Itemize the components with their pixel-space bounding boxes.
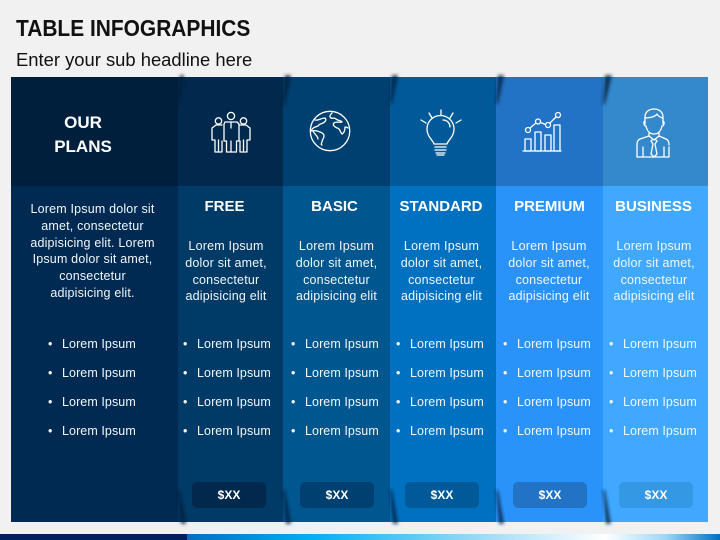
description: standard: Lorem Ipsum [404,239,479,253]
list: standard: Lorem Ipsum [410,395,484,409]
text: • [48,337,52,351]
list: free [183,337,271,438]
list: basic: Lorem Ipsum [305,366,379,380]
list: standard: Lorem Ipsum [410,424,484,438]
list: premium: Lorem Ipsum [517,366,591,380]
text: • [291,366,295,380]
heading: our plans: PLANS [54,136,112,156]
bottom color strip [0,534,720,540]
text: • [291,337,295,351]
list: our plans [48,337,136,438]
description: free: adipisicing elit [185,289,267,303]
plan name: basic: BASIC [311,198,358,215]
intro text: amet, consectetur [41,219,144,233]
list: premium: Lorem Ipsum [517,395,591,409]
text: • [291,424,295,438]
list: basic: Lorem Ipsum [305,424,379,438]
price: business: $XX [645,488,667,502]
description: premium: Lorem Ipsum [511,239,587,253]
intro text: Ipsum dolor sit amet, [33,252,152,266]
list: business: Lorem Ipsum [623,395,697,409]
title: TABLE INFOGRAPHICS [16,15,250,41]
list: free: Lorem Ipsum [197,337,271,351]
plan name: free: FREE [204,198,244,215]
list: our plans: Lorem Ipsum [62,395,136,409]
description: basic: dolor sit amet, [296,256,377,270]
subtitle: Enter your sub headline here [16,49,252,70]
intro text: consectetur [59,269,126,283]
panel: our plans column [11,77,178,522]
description: standard: dolor sit amet, [401,256,482,270]
description: free: consectetur [193,273,259,287]
list: standard: Lorem Ipsum [410,337,484,351]
text: • [396,395,400,409]
price: standard [405,482,479,508]
list: standard: Lorem Ipsum [410,366,484,380]
icon: bar chart with line [522,112,562,152]
list: our plans: Lorem Ipsum [62,337,136,351]
text: • [48,395,52,409]
text: • [48,366,52,380]
description: business: consectetur [621,273,687,287]
description: standard: consectetur [408,273,475,287]
price: basic [300,482,374,508]
text: • [609,424,613,438]
description: basic: Lorem Ipsum [299,239,374,253]
price: free: $XX [218,488,240,502]
description: free [185,239,267,303]
description: premium: consectetur [516,273,582,287]
plan name: standard: STANDARD [399,198,483,215]
panel: standard column [390,77,496,522]
panel: business column [603,77,708,522]
description: free: Lorem Ipsum [188,239,264,253]
description: premium [508,239,590,303]
icon: businessman [636,108,670,158]
price: basic: $XX [326,488,348,502]
panel: basic column [283,77,390,522]
list: free: Lorem Ipsum [197,366,271,380]
list: our plans: Lorem Ipsum [62,424,136,438]
description: business: adipisicing elit [613,289,695,303]
plan descriptions [185,239,695,303]
plan names [204,198,692,215]
list: free: Lorem Ipsum [197,395,271,409]
list: our plans: Lorem Ipsum [62,366,136,380]
description: basic [296,239,377,303]
text: • [396,424,400,438]
description: business: Lorem Ipsum [616,239,692,253]
text: • [48,424,52,438]
text: • [183,395,187,409]
description: premium: adipisicing elit [508,289,590,303]
text: • [503,337,507,351]
price: business [619,482,693,508]
list: basic: Lorem Ipsum [305,337,379,351]
description: standard: adipisicing elit [401,289,482,303]
description: business: dolor sit amet, [613,256,695,270]
list: premium: Lorem Ipsum [517,424,591,438]
icon: light bulb [420,109,462,156]
list: business: Lorem Ipsum [623,424,697,438]
list: standard [396,337,484,438]
text: • [183,424,187,438]
text: • [291,395,295,409]
text: • [396,366,400,380]
text: • [609,337,613,351]
intro text: adipisicing elit. [50,286,135,300]
panel: free column [178,77,283,522]
list: business: Lorem Ipsum [623,337,697,351]
price: premium [513,482,587,508]
list: premium [503,337,591,438]
plan name: business: BUSINESS [615,198,692,215]
list: basic [291,337,379,438]
price: free [192,482,266,508]
intro text [30,202,155,300]
list: basic: Lorem Ipsum [305,395,379,409]
text: • [183,366,187,380]
intro text: adipisicing elit. Lorem [30,236,155,250]
intro text: Lorem Ipsum dolor sit [31,202,154,216]
price: standard: $XX [431,488,453,502]
description: standard [401,239,482,303]
icon: team [211,112,251,153]
description: basic: adipisicing elit [296,289,377,303]
text: • [609,395,613,409]
description: basic: consectetur [303,273,370,287]
text: • [503,424,507,438]
list: premium: Lorem Ipsum [517,337,591,351]
list: free: Lorem Ipsum [197,424,271,438]
text: • [183,337,187,351]
list: business [609,337,697,438]
description: premium: dolor sit amet, [508,256,590,270]
price: premium: $XX [539,488,561,502]
text: • [396,337,400,351]
panel: premium column [496,77,603,522]
text: • [609,366,613,380]
list: business: Lorem Ipsum [623,366,697,380]
heading: our plans: OUR [64,113,102,132]
plan name: premium: PREMIUM [514,198,585,215]
description: free: dolor sit amet, [185,256,267,270]
heading: our plans [54,113,112,156]
description: business [613,239,695,303]
text: • [503,395,507,409]
icon: globe [310,110,350,152]
text: • [503,366,507,380]
